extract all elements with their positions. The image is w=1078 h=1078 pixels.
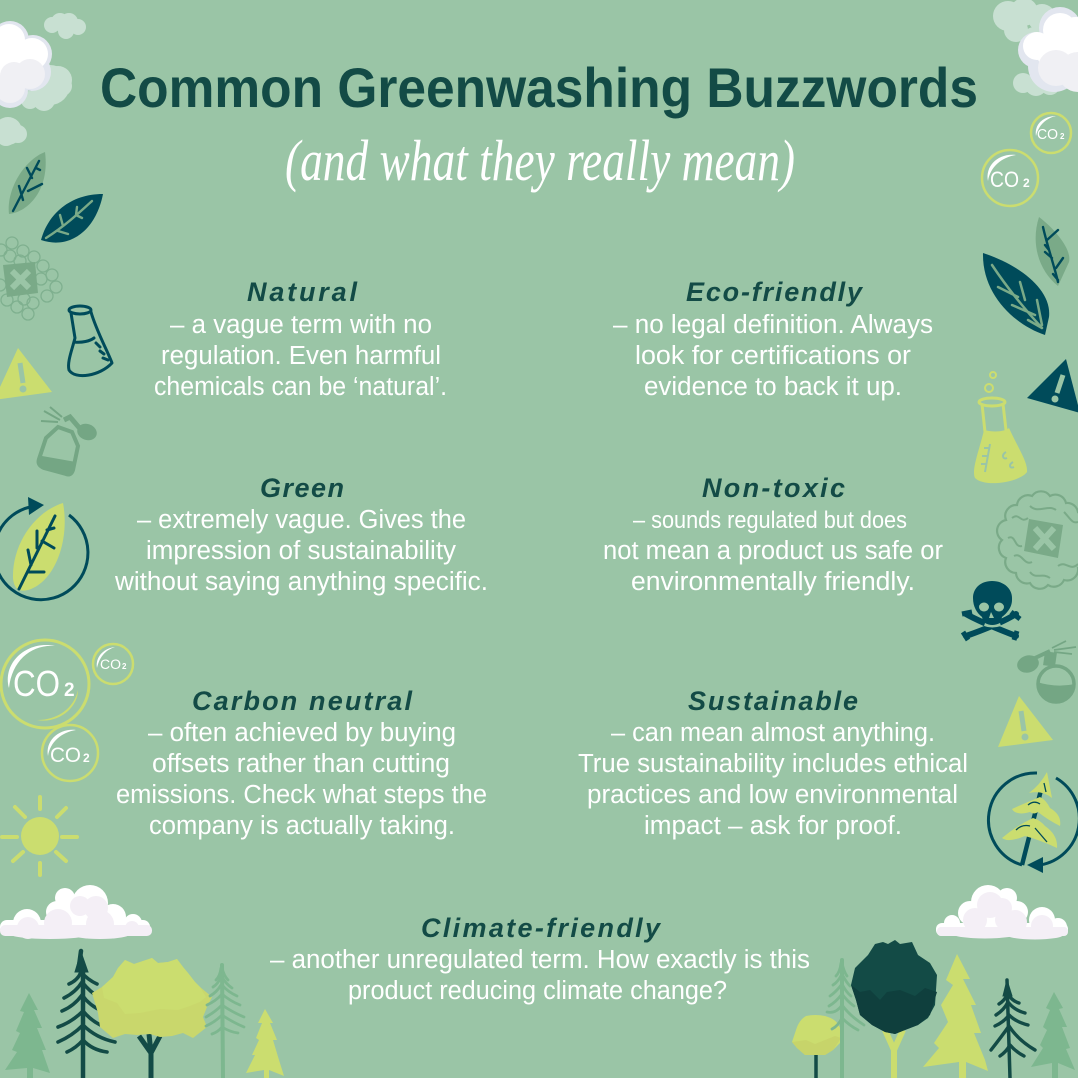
text block: Eco-friendly: Eco-friendly [686,277,864,307]
text block: Green [114,473,488,596]
text block: Carbon neutral: Carbon neutral [192,686,412,716]
icon: small CO2 bubble left [93,644,133,684]
icon: skull and crossbones [962,581,1020,640]
icon: recycling circle with tree [988,772,1078,873]
icon: white cloud top right [1018,7,1078,92]
icon: yellow tree left [92,958,212,1078]
text block: Natural: – a vague term with no [170,311,432,339]
text block: Natural: Natural [247,277,357,307]
text block: Eco-friendly: – no legal definition. Always [613,311,933,339]
text block: Eco-friendly: look for certifications or [635,342,912,370]
icon: large CO2 bubble: 2 [64,680,75,701]
icon: pale pine right [1031,992,1075,1078]
text block: Natural [154,277,447,401]
text block: Eco-friendly [613,277,933,401]
text block: Climate-friendly [270,913,810,1005]
text block: Carbon neutral [116,686,487,840]
text block: Green: without saying anything specific. [114,568,488,596]
icon: cloud bottom left [0,885,152,939]
icon: cloud bottom right [936,885,1068,940]
icon: yellow pine left [246,1009,284,1078]
text block: Green: – extremely vague. Gives the [137,506,466,534]
text block: Climate-friendly: product reducing climate change? [348,977,727,1005]
icon: medium CO2 bubble left: 2 [83,751,90,765]
icon: recycling circle with leaf [0,497,88,600]
icon: small CO2 bubble right: 2 [1060,132,1065,141]
icon: medium CO2 bubble left: CO [50,744,81,767]
text block: Carbon neutral: company is actually taking. [149,812,455,840]
icon: spray bottle left [39,407,99,474]
icon: pale clouds top left [0,13,86,146]
text block: Sustainable: practices and low environmental [587,781,958,809]
icon: dark tree right [851,940,937,1078]
text block: Non-toxic: Non-toxic [702,473,845,503]
icon: small CO2 bubble left: 2 [122,662,127,671]
icon: medium CO2 bubble right: CO [990,167,1019,192]
icon: pale pine left [5,993,50,1078]
text block: Non-toxic: – sounds regulated but does [633,507,907,534]
icon: dark branchy pine right [991,980,1035,1078]
subtitle: (and what they really mean) [285,128,795,193]
icon: small CO2 bubble right: CO [1037,126,1058,143]
icon: green leaf left [9,152,46,214]
icon: spray bottle right [1015,641,1076,702]
icon: pale clouds top right [993,0,1060,96]
text block: Sustainable: impact – ask for proof. [644,812,902,840]
icon: small CO2 bubble right [1031,113,1071,153]
text block: Non-toxic [603,473,943,596]
icon: dark branchy pine left [58,951,115,1078]
text block: Carbon neutral: – often achieved by buying [148,719,456,747]
text block: Natural: regulation. Even harmful [161,342,441,370]
icon: medium CO2 bubble right [982,150,1038,206]
icon: yellow flask [974,372,1027,483]
icon: small CO2 bubble left: CO [100,657,121,672]
text block: Non-toxic: environmentally friendly. [631,568,915,596]
text block: Sustainable: Sustainable [688,686,858,716]
text block: Non-toxic: not mean a product us safe or [603,537,943,565]
text block: Natural: chemicals can be ‘natural’. [154,373,447,401]
icon: sun [2,797,77,875]
icon: thin green pine left [206,965,244,1078]
icon: medium CO2 bubble right: 2 [1023,176,1030,190]
icon: yellow pine right [923,954,988,1078]
title: Common Greenwashing Buzzwords [100,56,978,119]
icon: toxic cluster with X [0,237,62,320]
icon: dark leaf left [41,194,103,243]
text block: Climate-friendly: Climate-friendly [421,913,662,943]
text block: Climate-friendly: – another unregulated term. How exactly is this [270,946,810,974]
icon: small yellow tree right [792,1015,842,1078]
text block: Sustainable: True sustainability includes ethical [578,750,968,778]
icon: large CO2 bubble: CO [13,663,60,704]
icon: warning triangle yellow right [998,696,1053,747]
text block: Green: impression of sustainability [146,537,456,565]
icon: white cloud top left [0,21,52,108]
text block: Sustainable [578,686,968,840]
text block: Green: Green [260,473,344,503]
icon: flask outline left [69,306,112,376]
icon: green leaf right [1036,217,1069,286]
icon: dark leaf right [983,253,1049,335]
text block: Carbon neutral: offsets rather than cutting [152,750,450,778]
icon: large CO2 bubble [1,640,89,728]
text block: Carbon neutral: emissions. Check what steps the [116,781,487,809]
icon: thin green pine right [827,960,864,1078]
text block: Eco-friendly: evidence to back it up. [644,373,902,401]
icon: warning triangle left [0,348,52,400]
text block: Sustainable: – can mean almost anything. [611,719,935,747]
icon: brain with X [997,491,1078,589]
icon: warning triangle dark right [1027,359,1078,413]
icon: medium CO2 bubble left [42,725,98,781]
